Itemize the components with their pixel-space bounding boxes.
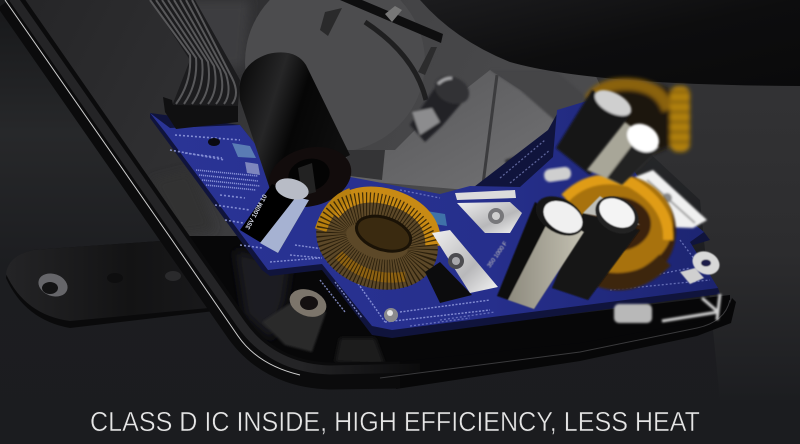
small white cylinder xyxy=(543,166,572,183)
small blue capacitor: 35V 100M 10 xyxy=(245,193,269,231)
disc xyxy=(245,0,425,152)
right washer and chip xyxy=(680,247,723,284)
black cylinder xyxy=(239,52,358,216)
lower interior of enclosure xyxy=(188,236,730,378)
front capacitor: 350 1000 F xyxy=(487,241,509,269)
connector xyxy=(163,97,238,129)
middle toroid xyxy=(554,174,676,288)
front capacitor xyxy=(487,188,591,309)
top right dark shape xyxy=(420,0,800,86)
rear capacitor black xyxy=(556,85,635,175)
lower left mounting plate xyxy=(6,236,240,328)
rear toroid xyxy=(587,81,690,155)
right black capacitor xyxy=(552,189,645,300)
small blue capacitor xyxy=(240,175,311,253)
right side backdrop xyxy=(560,70,800,400)
pcb traces xyxy=(170,135,710,326)
heat sink: right xyxy=(635,170,707,228)
icon: countersunk hole xyxy=(35,270,71,300)
caption: CLASS D IC INSIDE, HIGH EFFICIENCY, LESS HEAT xyxy=(90,406,700,437)
lower right reflections xyxy=(614,294,720,323)
large toroid xyxy=(304,177,450,305)
lower wall panels xyxy=(345,70,560,192)
chip xyxy=(232,143,256,158)
circuit board xyxy=(150,100,720,338)
housing interior xyxy=(9,0,600,345)
wall highlight xyxy=(165,0,250,70)
ribbon cable xyxy=(150,0,240,106)
screw post xyxy=(410,71,474,142)
standoff post xyxy=(262,284,330,352)
rear capacitor beige xyxy=(587,118,664,185)
heat sink: front centre xyxy=(425,230,498,303)
top metal clip xyxy=(320,0,443,75)
heat sink: rear centre xyxy=(455,190,522,233)
board screw xyxy=(384,308,398,322)
